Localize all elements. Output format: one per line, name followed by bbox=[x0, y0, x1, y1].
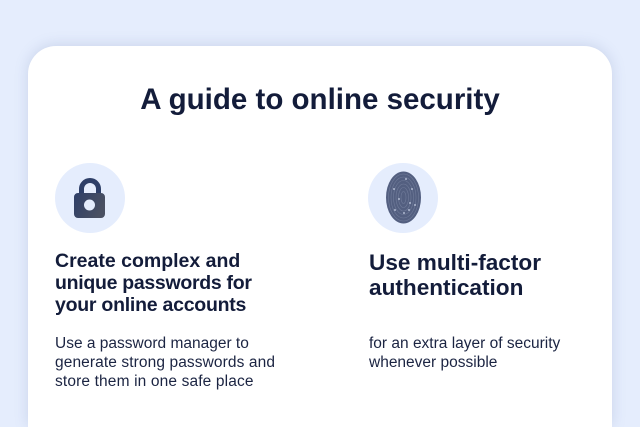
heading: multi-factor bbox=[369, 250, 541, 300]
text: passwords advice: Use a password manager to bbox=[55, 335, 249, 352]
heading: passwords: your online accounts bbox=[55, 294, 246, 316]
heading: passwords bbox=[55, 250, 252, 316]
icon: padlock bbox=[55, 163, 125, 233]
heading: passwords: unique passwords for bbox=[55, 272, 252, 294]
heading: multi-factor: Use multi-factor bbox=[369, 250, 541, 275]
icon: fingerprint bbox=[368, 163, 438, 233]
text: multi-factor advice: for an extra layer of security bbox=[369, 335, 560, 352]
heading: multi-factor: authentication bbox=[369, 275, 523, 300]
text: multi-factor advice bbox=[369, 335, 560, 371]
heading: passwords: Create complex and bbox=[55, 250, 240, 272]
text: passwords advice: generate strong passwords and bbox=[55, 354, 275, 371]
text: multi-factor advice: whenever possible bbox=[369, 354, 497, 371]
text: passwords advice bbox=[55, 335, 275, 390]
title: A guide to online security bbox=[140, 83, 500, 116]
text: passwords advice: store them in one safe place bbox=[55, 373, 254, 390]
